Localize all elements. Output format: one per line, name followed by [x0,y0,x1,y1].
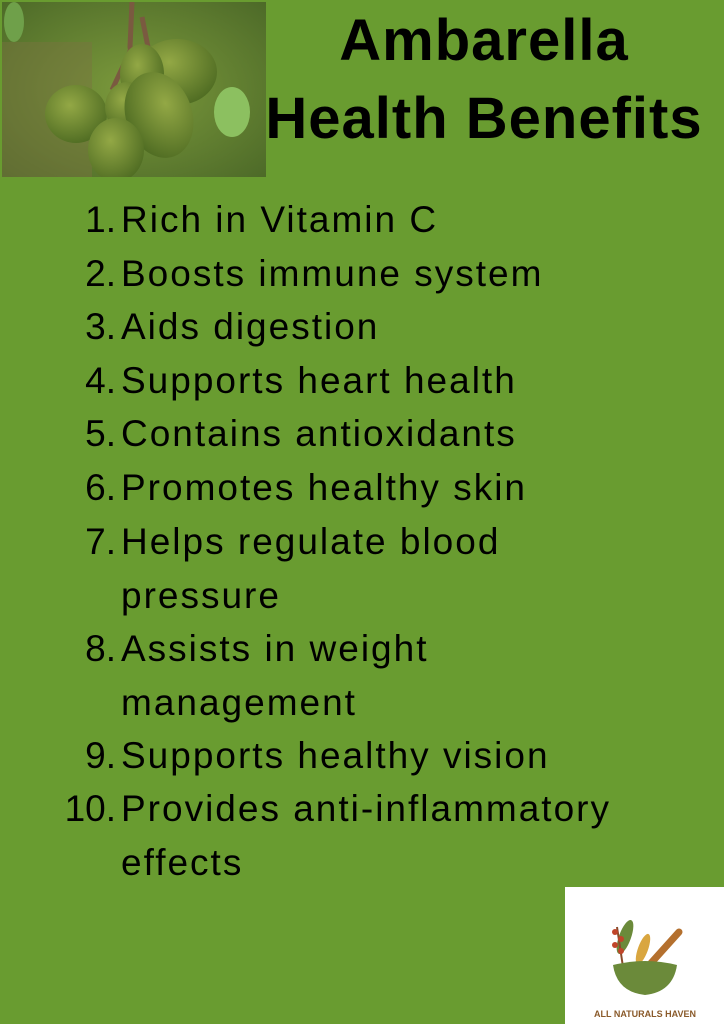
text: Ambarella [339,8,629,73]
item 2: 2. [85,253,116,294]
item 5: 5. [85,413,116,454]
item 1: Rich in Vitamin C [121,199,438,240]
logo: All Naturals Haven: ALL NATURALS HAVEN [594,1009,696,1019]
item 8: Assists in weight [121,628,428,669]
item 7: 7. [85,521,116,562]
item 6: Promotes healthy skin [121,467,527,508]
item 9: 9. [85,735,116,776]
item 3: Aids digestion [121,306,379,347]
item 8: 8. [85,628,116,669]
benefits list [65,199,650,995]
item 3: 3. [85,306,116,347]
item 7: pressure [121,575,281,616]
item 7 [85,521,500,616]
item 10: effects [121,842,243,883]
item 8: management [121,682,357,723]
logo: All Naturals Haven [565,887,724,1024]
item 7: Helps regulate blood [121,521,500,562]
photo: ambarella fruit [2,2,266,177]
item 10: Provides anti-inflammatory [121,788,611,829]
item 1: 1. [85,199,116,240]
item 9: Supports healthy vision [121,735,550,776]
item 2: Boosts immune system [121,253,543,294]
title [265,8,703,151]
item 6: 6. [85,467,116,508]
item 10 [65,788,611,883]
item 10: 10. [65,788,116,829]
item 4: 4. [85,360,116,401]
item 4: Supports heart health [121,360,517,401]
text: Health Benefits [265,86,703,151]
item 8 [85,628,428,723]
item 5: Contains antioxidants [121,413,517,454]
